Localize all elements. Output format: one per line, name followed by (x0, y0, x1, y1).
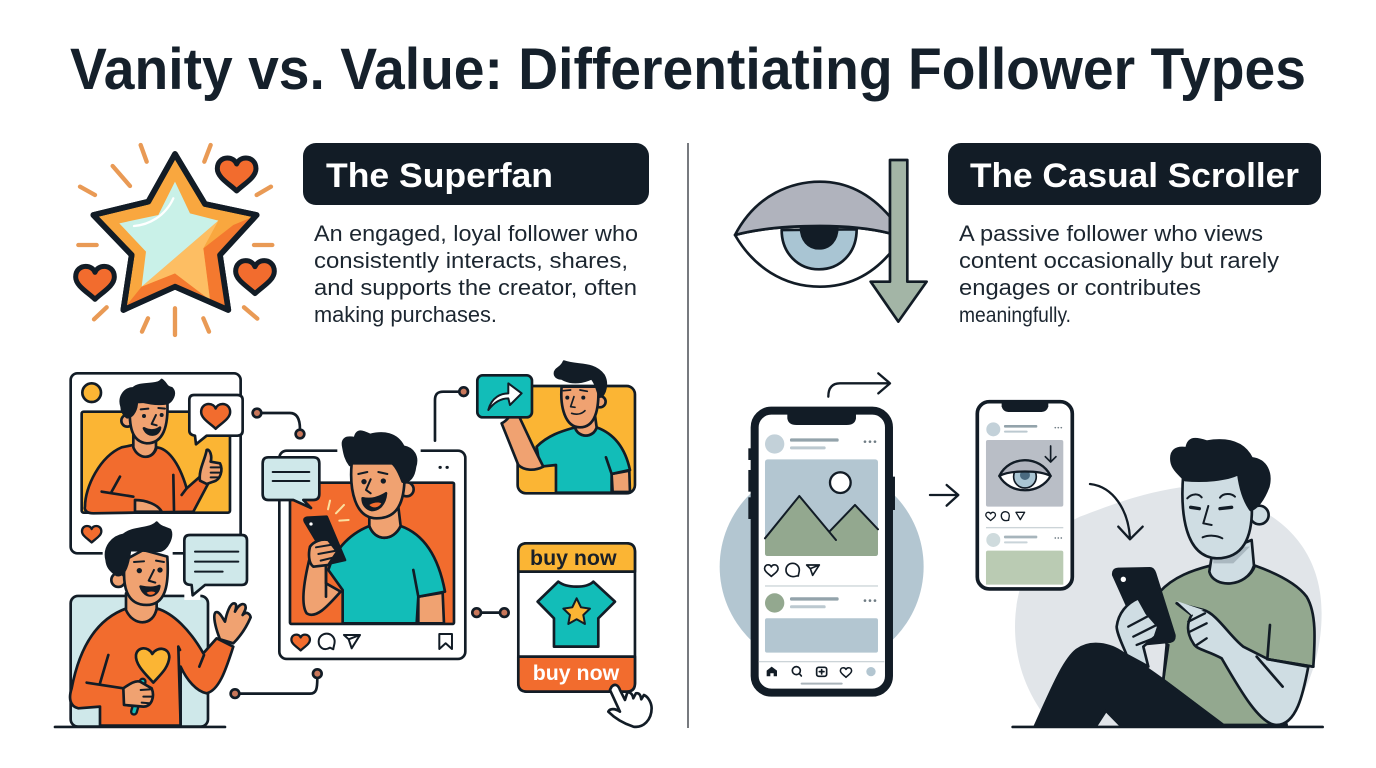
illustration: small phone with drooping eye (977, 402, 1072, 589)
illustration: buy now product card: buy now (530, 546, 617, 570)
illustration: fan sharing (477, 362, 635, 493)
heading: the superfan (303, 143, 649, 205)
text block: casual scroller description: A passive follower who views (959, 221, 1263, 246)
panel: the superfan (76, 143, 649, 335)
text block: superfan description: An engaged, loyal follower who (314, 221, 638, 246)
illustration: buy now product card (518, 543, 652, 727)
text block: casual scroller description: meaningfully. (959, 304, 1071, 327)
text block: superfan description: consistently interacts, shares, (314, 248, 628, 273)
text block: superfan description: making purchases. (314, 302, 497, 327)
text block: casual scroller description: content occasionally but rarely (959, 248, 1279, 273)
panel: the casual scroller (735, 143, 1321, 327)
illustration: fan liking a post (71, 373, 304, 553)
heading: the casual scroller: The Casual Scroller (970, 157, 1299, 195)
heading: the casual scroller (948, 143, 1321, 205)
text block: superfan description (314, 221, 638, 327)
illustration: fan holding heart and waving (55, 523, 322, 727)
illustration: central post with man on phone (263, 387, 509, 659)
title: Vanity vs. Value: Differentiating Follower Types (70, 37, 1306, 102)
text block: casual scroller description: engages or contributes (959, 275, 1201, 300)
icon: drooping eye with down arrow (735, 160, 927, 322)
illustration: phone with social feed (720, 373, 958, 693)
illustration: buy now product card: buy now (533, 661, 620, 685)
heading: the superfan: The Superfan (326, 157, 553, 195)
text block: casual scroller description (959, 221, 1279, 327)
icon: star with hearts (76, 145, 274, 335)
illustration: bored man scrolling phone (1013, 439, 1323, 727)
text block: superfan description: and supports the creator, often (314, 275, 637, 300)
